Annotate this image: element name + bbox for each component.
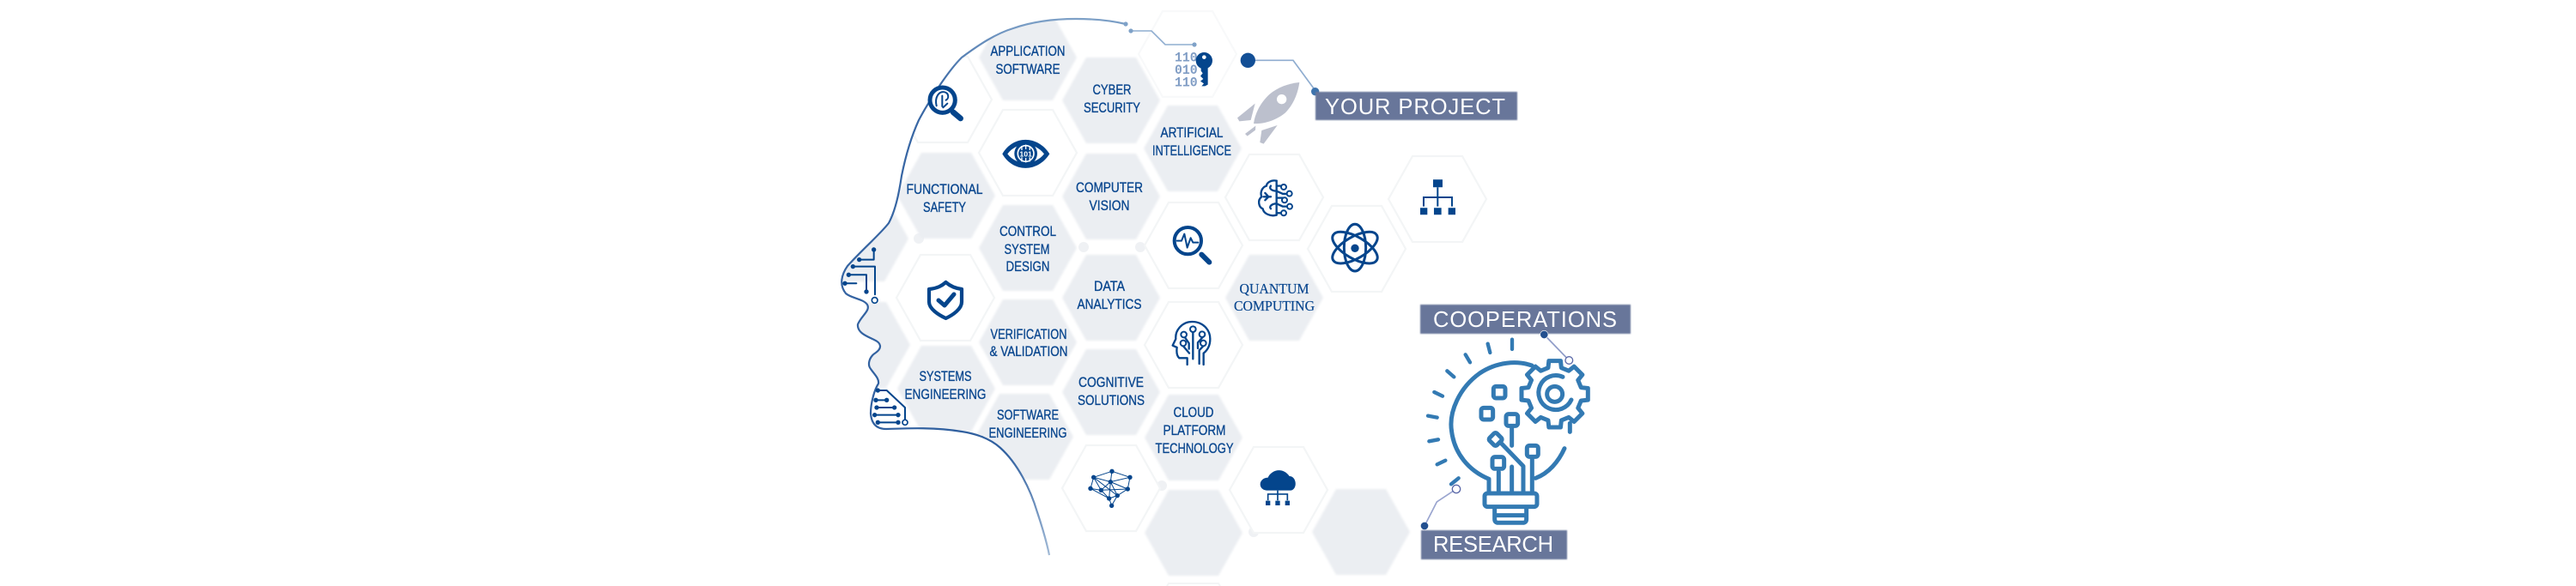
hex: data analytics xyxy=(1062,255,1160,341)
icon: binary key: 110 xyxy=(1175,75,1198,90)
connector dot xyxy=(1078,242,1089,252)
hex: systems engineering xyxy=(897,346,995,432)
hex: control system design xyxy=(979,205,1077,291)
hex: verification and validation: & VALIDATION xyxy=(989,344,1068,359)
circuit: nose xyxy=(842,247,878,303)
connector: cooperations to gear xyxy=(1540,330,1569,360)
hex: functional safety: FUNCTIONAL xyxy=(907,182,982,197)
icon: safety magnifier xyxy=(930,88,961,118)
hex: functional safety xyxy=(897,153,995,239)
hex: cognitive solutions xyxy=(1062,349,1160,435)
outline hex: network xyxy=(1062,445,1160,531)
icon: network xyxy=(1088,469,1133,508)
hex: data analytics: ANALYTICS xyxy=(1077,297,1142,312)
hex: control system design: DESIGN xyxy=(1006,259,1049,275)
crown end dot xyxy=(1123,21,1128,27)
hex: quantum computing: QUANTUM xyxy=(1240,281,1309,297)
hex: functional safety: SAFETY xyxy=(923,200,966,215)
hex: artificial intelligence xyxy=(1144,106,1242,191)
hex: cloud platform technology: CLOUD xyxy=(1173,405,1214,420)
connector dot xyxy=(1157,480,1167,491)
hex: quantum computing xyxy=(1225,255,1323,341)
outline hex: head circuit xyxy=(1145,302,1242,388)
outlined hexagon tiles xyxy=(894,11,1486,533)
hex: data analytics: DATA xyxy=(1094,279,1125,294)
head outline xyxy=(841,19,1126,555)
hex: computer vision: COMPUTER xyxy=(1076,180,1143,196)
hex: control system design: CONTROL xyxy=(999,224,1056,239)
outline hex: atom xyxy=(1308,206,1406,292)
hex: software engineering: ENGINEERING xyxy=(989,426,1066,441)
hexagon: faint bottom outline xyxy=(1167,583,1220,586)
hex: systems engineering: ENGINEERING xyxy=(905,387,986,402)
hexagon grid with head-clipped tiles xyxy=(811,196,1410,586)
icon: binary key xyxy=(1175,51,1212,90)
outline hex: pulse magnifier xyxy=(1145,202,1242,288)
label: research xyxy=(1421,530,1567,559)
hexagon: top-left face filler xyxy=(843,213,908,281)
outline hex: key xyxy=(1139,11,1236,97)
hex: application software: APPLICATION xyxy=(991,44,1065,59)
hex: software engineering: SOFTWARE xyxy=(997,408,1059,423)
icon: rocket xyxy=(1237,82,1299,144)
icon: binary key: 010 xyxy=(1175,63,1198,78)
hex: application software: SOFTWARE xyxy=(996,62,1060,77)
hex: cognitive solutions: SOLUTIONS xyxy=(1078,393,1145,408)
icon: atom xyxy=(1327,224,1382,271)
hex: cloud platform technology xyxy=(1145,395,1242,480)
hexagon: lower face filler xyxy=(859,302,910,388)
icon: AI brain xyxy=(1259,180,1292,215)
icon: eye: 101 xyxy=(1019,149,1032,158)
icon: cloud platform xyxy=(1261,470,1296,505)
label: your project: YOUR PROJECT xyxy=(1325,95,1505,119)
hex: cloud platform technology: PLATFORM xyxy=(1163,423,1226,438)
outline hex: eye xyxy=(979,110,1077,196)
connector end dot xyxy=(1192,42,1197,47)
hex: computer vision: VISION xyxy=(1089,198,1130,214)
icon: binary key: 110 xyxy=(1175,51,1198,66)
outline hex: org chart xyxy=(1388,156,1486,242)
hexagon: grey bottom right xyxy=(1312,489,1410,575)
hex: artificial intelligence: INTELLIGENCE xyxy=(1152,143,1231,159)
hex: computer vision xyxy=(1062,154,1160,239)
circuit: chin xyxy=(872,388,908,425)
hex: cyber security: CYBER xyxy=(1092,82,1132,98)
icon: pulse magnifier xyxy=(1175,227,1209,263)
icon: lightbulb with gear xyxy=(1428,340,1588,523)
connector: your project xyxy=(1241,53,1319,95)
hex: systems engineering: SYSTEMS xyxy=(919,369,972,384)
hex: quantum computing: COMPUTING xyxy=(1234,298,1315,314)
icon: head circuit xyxy=(1173,322,1210,365)
hex: application software xyxy=(979,15,1077,100)
outline hex: safety magnifier xyxy=(914,56,993,143)
connector: crown to key xyxy=(1131,31,1194,45)
connector: research to bulb xyxy=(1421,485,1461,529)
hex: cyber security: SECURITY xyxy=(1084,100,1140,116)
hex: control system design: SYSTEM xyxy=(1005,242,1049,257)
label: cooperations: COOPERATIONS xyxy=(1433,308,1617,332)
hex: artificial intelligence: ARTIFICIAL xyxy=(1161,125,1223,141)
connector node: gear xyxy=(1565,357,1573,364)
outline hex: AI brain xyxy=(1225,154,1323,240)
hex: verification and validation xyxy=(979,299,1077,385)
hex: cognitive solutions: COGNITIVE xyxy=(1078,375,1144,390)
hex: verification and validation: VERIFICATION xyxy=(991,327,1066,342)
hexagon: grey bottom centre xyxy=(1145,490,1242,576)
hex: software engineering xyxy=(975,394,1073,480)
icon: shield check xyxy=(929,282,962,318)
outline hex: shield xyxy=(896,255,994,341)
connector dot xyxy=(1135,242,1145,252)
hex: cyber security xyxy=(1062,57,1160,143)
outline hex: cloud xyxy=(1230,447,1327,533)
connector start dot xyxy=(1128,28,1133,33)
icon: eye xyxy=(1002,140,1049,168)
hex: cloud platform technology: TECHNOLOGY xyxy=(1156,441,1233,456)
connector dot xyxy=(1249,527,1259,537)
label: research: RESEARCH xyxy=(1433,533,1553,557)
icon: org chart xyxy=(1420,179,1455,214)
connector dot xyxy=(914,233,924,244)
